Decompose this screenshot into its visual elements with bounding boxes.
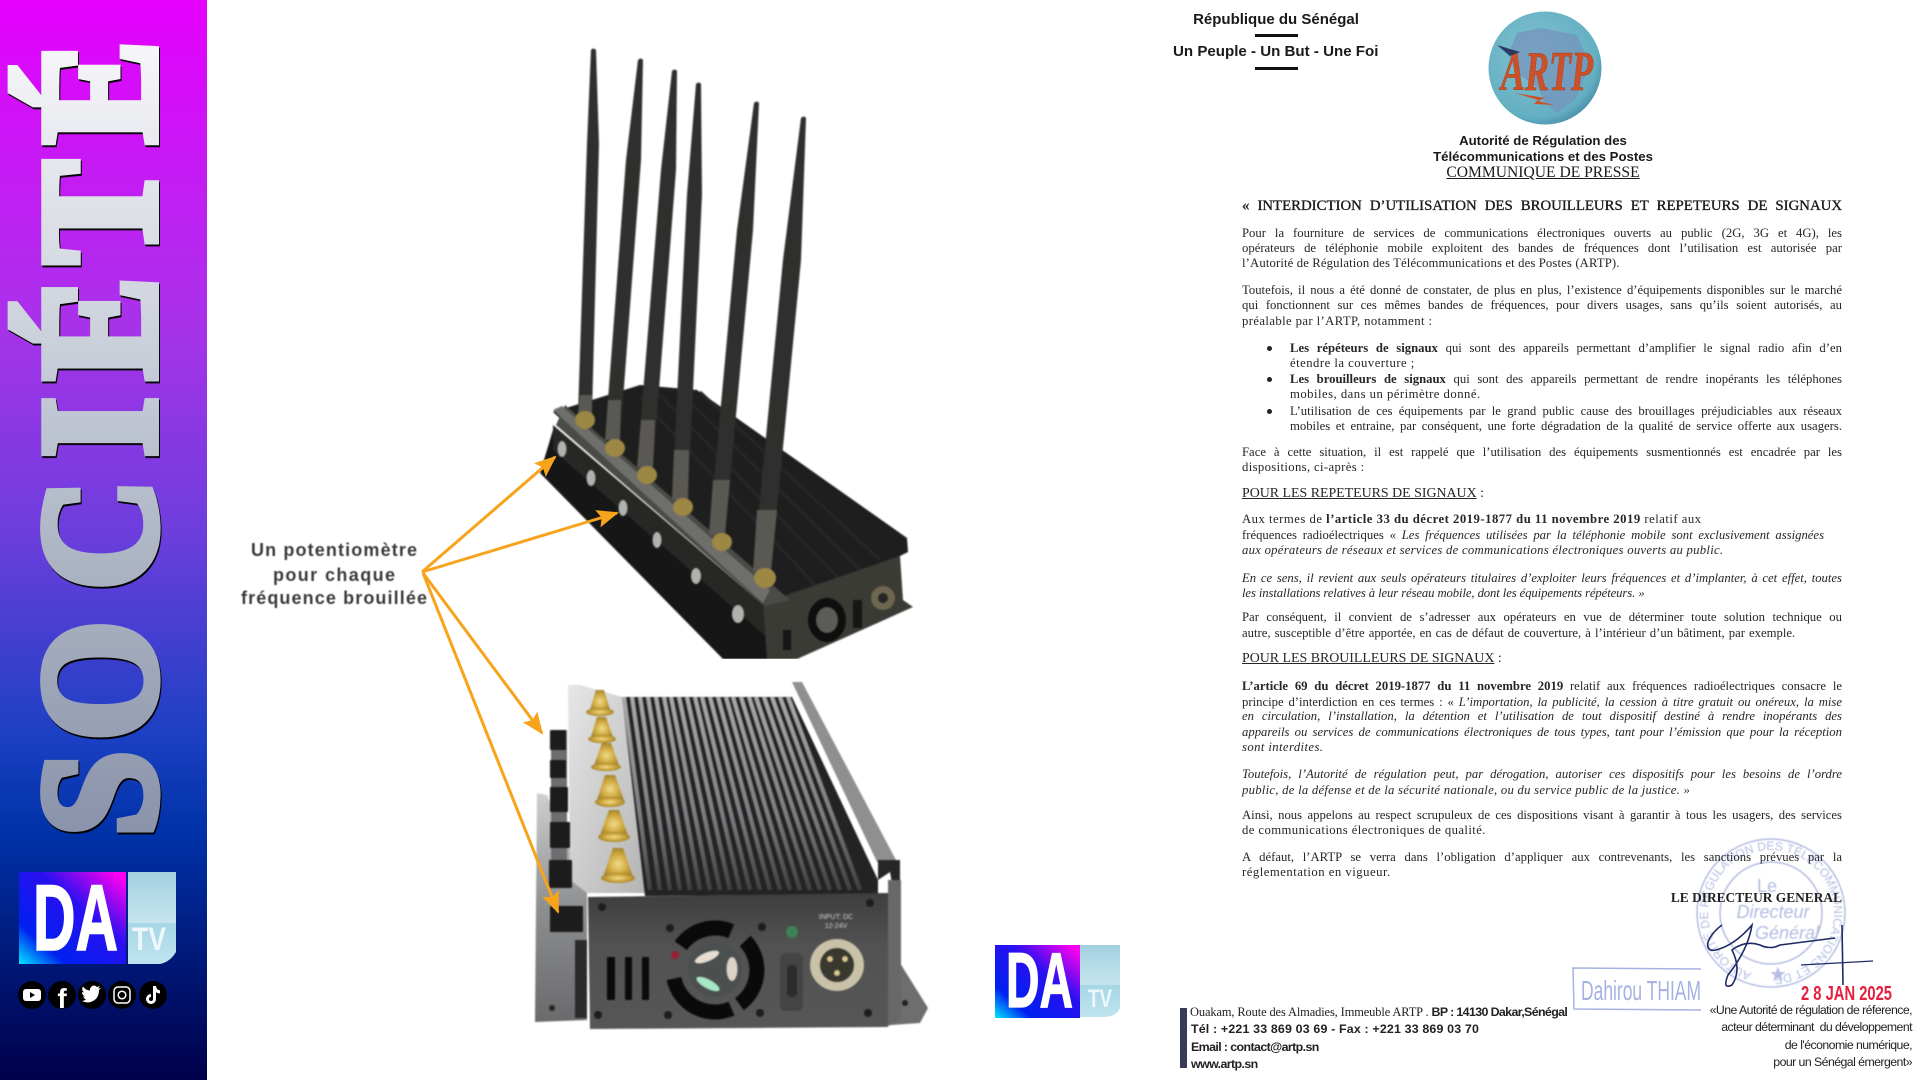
paragraph: observation: préalable par l’ARTP, notamment : [1242, 314, 1432, 328]
bullet list: étendre la couverture ; [1290, 356, 1415, 370]
brass connectors [575, 411, 776, 588]
sidebar DA TV logo: DA [33, 865, 118, 970]
dark side strip [575, 940, 587, 1018]
document body text [1241, 226, 1842, 879]
callout: potentiometer label: fréquence brouillée [241, 588, 427, 608]
DA TV watermark logo: TV [1088, 985, 1112, 1013]
paragraph: sanctions [1242, 850, 1842, 879]
potentiometer knobs [551, 730, 567, 888]
ARTP logo: ARTP [1499, 41, 1594, 103]
paragraph: sanctions: A défaut, l’ARTP se verra dans l’obligation d’appliquer aux contrevenants, les sanctions prévues par la [1242, 850, 1842, 864]
email: Email : contact@artp.sn [1191, 1040, 1319, 1054]
social media icons [18, 981, 167, 1014]
bullet list: mobiles, dans un périmètre donné. [1290, 387, 1481, 401]
jammer device photo, rear view: 12-24V [825, 923, 848, 930]
jammer device photo, top view with antennas [540, 48, 913, 659]
paragraph: article 69: sont interdites. [1242, 740, 1323, 754]
paragraph: appel: Ainsi, nous appelons au respect scrupuleux de ces dispositions visant à garantir à tous les usagers, des services [1242, 808, 1842, 822]
paragraph: observation: qui fonctionnent sur ces mêmes bandes de fréquences, pour divers usages, sans qu’ils soient autorisés, au [1242, 298, 1842, 312]
paragraph: article 33: Aux termes de l’article 33 du décret 2019-1877 du 11 novembre 2019 relatif aux [1242, 512, 1702, 526]
paragraph: seuls opérateurs: En ce sens, il revient aux seuls opérateurs titulaires d’exploiter leurs fréquences et d’implanter, à cet effet, toutes [1242, 571, 1842, 585]
paragraph: dérogation [1241, 767, 1842, 797]
sidebar title text: SOCIÉTÉ [6, 41, 191, 837]
orange arrows to potentiometers [422, 457, 617, 912]
bullet list: Les brouilleurs de signaux qui sont des appareils permettant de rendre inopérants les téléphones [1290, 372, 1842, 386]
power input connector [810, 939, 864, 991]
paragraph: article 69 [1242, 679, 1842, 754]
paragraph: dérogation: public, de la défense et de la sécurité nationale, ou du service public de la justice. » [1242, 783, 1690, 797]
paragraph: appel: de communications électroniques de qualité. [1242, 823, 1486, 837]
document title: « INTERDICTION D’UTILISATION DES BROUILLEURS ET REPETEURS DE SIGNAUX [1242, 198, 1842, 214]
header rules [1255, 34, 1298, 70]
subheading: brouilleurs: POUR LES BROUILLEURS DE SIGNAUX : [1242, 651, 1502, 666]
paragraph: seuls opérateurs: les installations relatives à leur réseau mobile, dont les équipements répéteurs. » [1242, 586, 1644, 600]
footer accent bar [1180, 1008, 1187, 1068]
bullet list: Les répéteurs de signaux qui sont des appareils permettant d’amplifier le signal radio afin d’en [1290, 341, 1842, 355]
base flanges [535, 793, 587, 1022]
paragraph: context: l’Autorité de Régulation des Télécommunications et des Postes (ARTP). [1242, 256, 1620, 270]
signatory title: LE DIRECTEUR GENERAL [1671, 890, 1842, 905]
agency name [1433, 133, 1653, 164]
callout: potentiometer label: pour chaque [273, 565, 395, 585]
grey connector panel [568, 685, 645, 893]
footer: agency slogan [1710, 1003, 1912, 1069]
name stamp [1573, 968, 1701, 1010]
official stamp: Général [1755, 923, 1820, 943]
agency name: Autorité de Régulation des [1459, 133, 1627, 148]
footer: agency slogan: pour un Sénégal émergent» [1773, 1055, 1912, 1069]
heatsink fins [622, 697, 878, 896]
paragraph: observation: Toutefois, il nous a été donné de constater, de plus en plus, l’existence d’équipements disponibles sur le marché [1242, 283, 1842, 297]
status LED and power switch [786, 926, 798, 938]
antenna lower shafts [578, 395, 777, 572]
bullet list: mobiles et entraine, par conséquent, une forte dégradation de la qualité de service offerte aux usagers. [1290, 419, 1842, 433]
paragraph: conséquence [1242, 610, 1842, 640]
paragraph: conséquence: Par conséquent, il convient de s’adresser aux opérateurs en vue de déterminer toute solution technique ou [1242, 610, 1842, 624]
sidebar panel: SOCIÉTÉ [0, 0, 207, 1080]
phone and fax: Tél : +221 33 869 03 69 - Fax : +221 33 869 03 70 [1191, 1022, 1479, 1036]
agency name: Télécommunications et des Postes [1433, 149, 1653, 164]
paragraph: context: opérateurs de téléphonie mobile exploitent des bandes de fréquences dont l’utilisation est autorisée par [1242, 241, 1842, 255]
footer: agency slogan: «Une Autorité de régulation de réference, [1710, 1003, 1912, 1017]
press release heading: COMMUNIQUE DE PRESSE [1446, 164, 1640, 181]
website: www.artp.sn [1191, 1057, 1258, 1071]
gold antenna connectors [586, 690, 635, 883]
paragraph: conséquence: autre, susceptible d’être apportée, en cas de défaut de couverture, à l’intérieur d’un bâtiment, par exemple. [1242, 626, 1795, 640]
footer: agency slogan: de l'économie numérique, [1785, 1038, 1912, 1052]
paragraph: article 33 [1242, 512, 1824, 557]
header: République du Sénégal: République du Sénégal [1193, 11, 1359, 28]
DA TV watermark logo: DA [1006, 936, 1073, 1024]
upper side band [553, 425, 770, 640]
header: motto: Un Peuple - Un But - Une Foi [1173, 43, 1378, 60]
front fan and power connector [808, 598, 846, 642]
paragraph: article 69: appareils ou services de communications électroniques de tous types, tant pour l’émission que pour la réception [1242, 725, 1842, 739]
bullet list [1267, 341, 1842, 433]
paragraph: context [1242, 226, 1842, 270]
name stamp: Dahirou THIAM [1581, 975, 1701, 1006]
fan [671, 928, 757, 1012]
antennas [577, 48, 807, 510]
paragraph: context: Pour la fourniture de services de communications électroniques ouverts au public (2G, 3G et 4G), les [1242, 226, 1842, 240]
knobs [558, 441, 744, 623]
heatsink top [553, 385, 908, 606]
paragraph: observation [1242, 283, 1842, 328]
input rating label: INPUT: DC [819, 914, 853, 921]
official stamp: Directeur [1736, 902, 1811, 922]
social media icons: f [57, 983, 67, 1014]
official stamp: AUTORITÉ DE RÉGULATION DES TÉLÉCOMMUNICATIONS ET DES POSTES [1699, 841, 1843, 984]
paragraph: rappel: dispositions, ci-après : [1242, 460, 1364, 474]
subheading: répéteurs: POUR LES REPETEURS DE SIGNAUX : [1242, 486, 1484, 501]
jammer device photo, rear view [535, 682, 928, 1029]
paragraph: article 33: fréquences radioélectriques « Les fréquences utilisées par la téléphonie mobile sont exclusivement assignées [1242, 528, 1824, 542]
paragraph: rappel [1242, 445, 1842, 474]
callout: potentiometer label: Un potentiomètre [251, 540, 417, 560]
rear face [588, 893, 888, 1029]
screws [594, 899, 874, 1019]
paragraph: seuls opérateurs [1242, 571, 1842, 600]
paragraph: article 33: aux opérateurs de réseaux et services de communications électroniques ouverts au public. [1242, 543, 1723, 557]
official stamp: ★ [1769, 962, 1787, 986]
ARTP logo [1488, 12, 1602, 124]
front face [763, 556, 913, 659]
paragraph: dérogation: Toutefois, l’Autorité de régulation peut, par dérogation, autoriser ces dispositifs pour les besoins de l’ordre [1242, 767, 1842, 781]
paragraph: article 69: principe d’interdiction en ces termes : « L’importation, la publicité, la cession à titre gratuit ou onéreux, la mise [1242, 695, 1842, 709]
official stamp: Le [1757, 876, 1777, 896]
paragraph: article 69: en circulation, l’installation, la détention et l’utilisation de tout dispositif destiné à rendre inopérants des [1242, 709, 1842, 723]
bullet list: L’utilisation de ces équipements par le grand public cause des brouillages préjudiciables aux réseaux [1290, 404, 1842, 418]
paragraph: appel [1242, 808, 1842, 837]
sidebar DA TV logo: TV [132, 921, 167, 957]
rail band [556, 405, 790, 606]
lower side face [540, 430, 775, 659]
paragraph: sanctions: réglementation en vigueur. [1242, 865, 1391, 879]
footer: agency slogan: acteur déterminant du développement [1721, 1020, 1912, 1034]
callout: potentiometer label [241, 540, 427, 608]
signature [1708, 925, 1873, 986]
rear face side fins [888, 880, 901, 1026]
footer: contact details [1190, 1005, 1567, 1071]
paragraph: article 69: L’article 69 du décret 2019-1877 du 11 novembre 2019 relatif aux fréquences radioélectriques consacre le [1242, 679, 1842, 693]
heatsink right rail [792, 682, 897, 862]
address: Ouakam, Route des Almadies, Immeuble ARTP . BP : 14130 Dakar,Sénégal [1190, 1005, 1567, 1019]
vents [607, 957, 649, 1000]
paragraph: rappel: Face à cette situation, il est rappelé que l’utilisation des équipements susmentionnés est encadrée par les [1242, 445, 1842, 459]
